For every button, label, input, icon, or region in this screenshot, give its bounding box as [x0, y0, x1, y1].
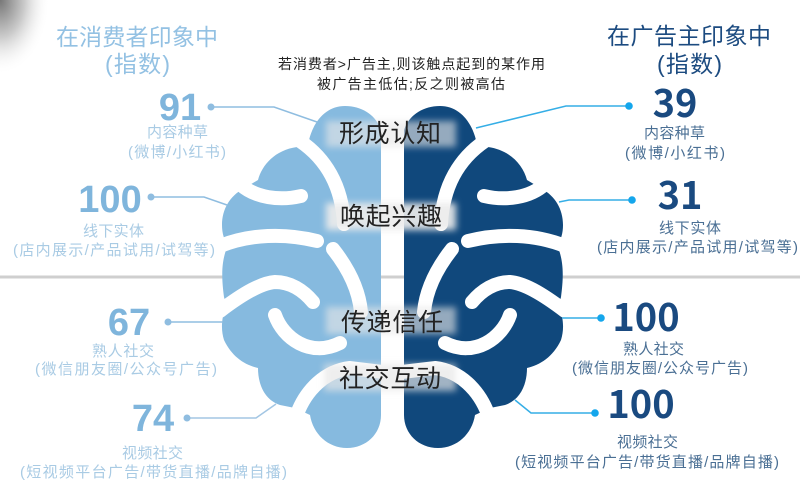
right stat: offline 31: 31 — [658, 165, 702, 220]
left stat: video social 74: 视频社交 — [122, 444, 183, 462]
connector: right 100 social — [562, 314, 605, 322]
left stat: offline 100: (店内展示/产品试用/试驾等) — [13, 241, 215, 259]
connector: left 74 — [184, 404, 276, 422]
caption: form awareness: 形成认知 — [339, 120, 441, 148]
right stat: acquaintance social 100: 熟人社交 — [623, 340, 684, 358]
right stat: video social 100: 100 — [607, 374, 675, 429]
left stat: acquaintance social 67: 熟人社交 — [92, 342, 154, 360]
left stat: acquaintance social 67: 67 — [108, 302, 150, 344]
left stat: acquaintance social 67: (微信朋友圈/公众号广告) — [35, 361, 217, 378]
left stat: acquaintance social 67 — [35, 302, 217, 378]
right stat: offline 31 — [597, 165, 798, 256]
left stat: video social 74: (短视频平台广告/带货直播/品牌自播) — [20, 464, 287, 481]
right stat: acquaintance social 100 — [572, 287, 748, 377]
right stat: video social 100: 视频社交 — [617, 433, 678, 451]
left stat: offline 100: 100 — [78, 179, 142, 221]
left stat: content seeding 91: 91 — [159, 87, 201, 129]
connector: left 91 — [208, 104, 317, 122]
explanatory note: 被广告主低估;反之则被高估 — [317, 76, 505, 92]
right stat: content seeding 39: (微博/小红书) — [625, 145, 725, 162]
explanatory note: 若消费者>广告主,则该触点起到的某作用 — [278, 56, 545, 72]
left stat: video social 74 — [20, 398, 287, 481]
brain: right hemisphere — [402, 106, 565, 448]
caption: arouse interest: 唤起兴趣 — [340, 203, 442, 231]
left stat: content seeding 91: (微博/小红书) — [128, 144, 226, 161]
heading: consumer impression: 在消费者印象中 — [56, 24, 218, 50]
heading: consumer impression — [56, 24, 218, 77]
connector: left 67 — [164, 318, 223, 326]
brain: left hemisphere — [220, 106, 383, 448]
left stat: content seeding 91 — [128, 87, 226, 161]
left stat: video social 74: 74 — [132, 398, 174, 440]
right stat: content seeding 39 — [625, 73, 725, 162]
right stat: acquaintance social 100: (微信朋友圈/公众号广告) — [572, 360, 748, 377]
right stat: offline 31: 线下实体 — [659, 220, 721, 237]
heading: advertiser impression: (指数) — [657, 51, 722, 77]
left stat: offline 100: 线下实体 — [83, 223, 144, 240]
connector: right 39 — [476, 102, 633, 128]
background corner shadow — [0, 0, 50, 75]
left stat: offline 100 — [13, 179, 215, 259]
connector: right 31 — [559, 196, 636, 204]
caption: convey trust: 传递信任 — [341, 309, 443, 337]
right stat: video social 100 — [515, 374, 779, 471]
heading: consumer impression: (指数) — [105, 51, 170, 77]
caption: social interaction: 社交互动 — [339, 365, 441, 393]
right stat: offline 31: (店内展示/产品试用/试驾等) — [597, 238, 798, 256]
heading: advertiser impression — [607, 23, 771, 77]
explanatory note — [278, 56, 545, 92]
horizontal divider line — [0, 276, 800, 278]
right stat: acquaintance social 100: 100 — [612, 287, 680, 342]
connector: right 100 video — [515, 400, 599, 417]
right stat: content seeding 39: 39 — [653, 73, 697, 128]
right stat: content seeding 39: 内容种草 — [644, 125, 705, 142]
connector: left 100 — [148, 194, 227, 205]
left stat: content seeding 91: 内容种草 — [147, 124, 208, 141]
right stat: video social 100: (短视频平台广告/带货直播/品牌自播) — [515, 454, 779, 471]
heading: advertiser impression: 在广告主印象中 — [607, 23, 771, 49]
